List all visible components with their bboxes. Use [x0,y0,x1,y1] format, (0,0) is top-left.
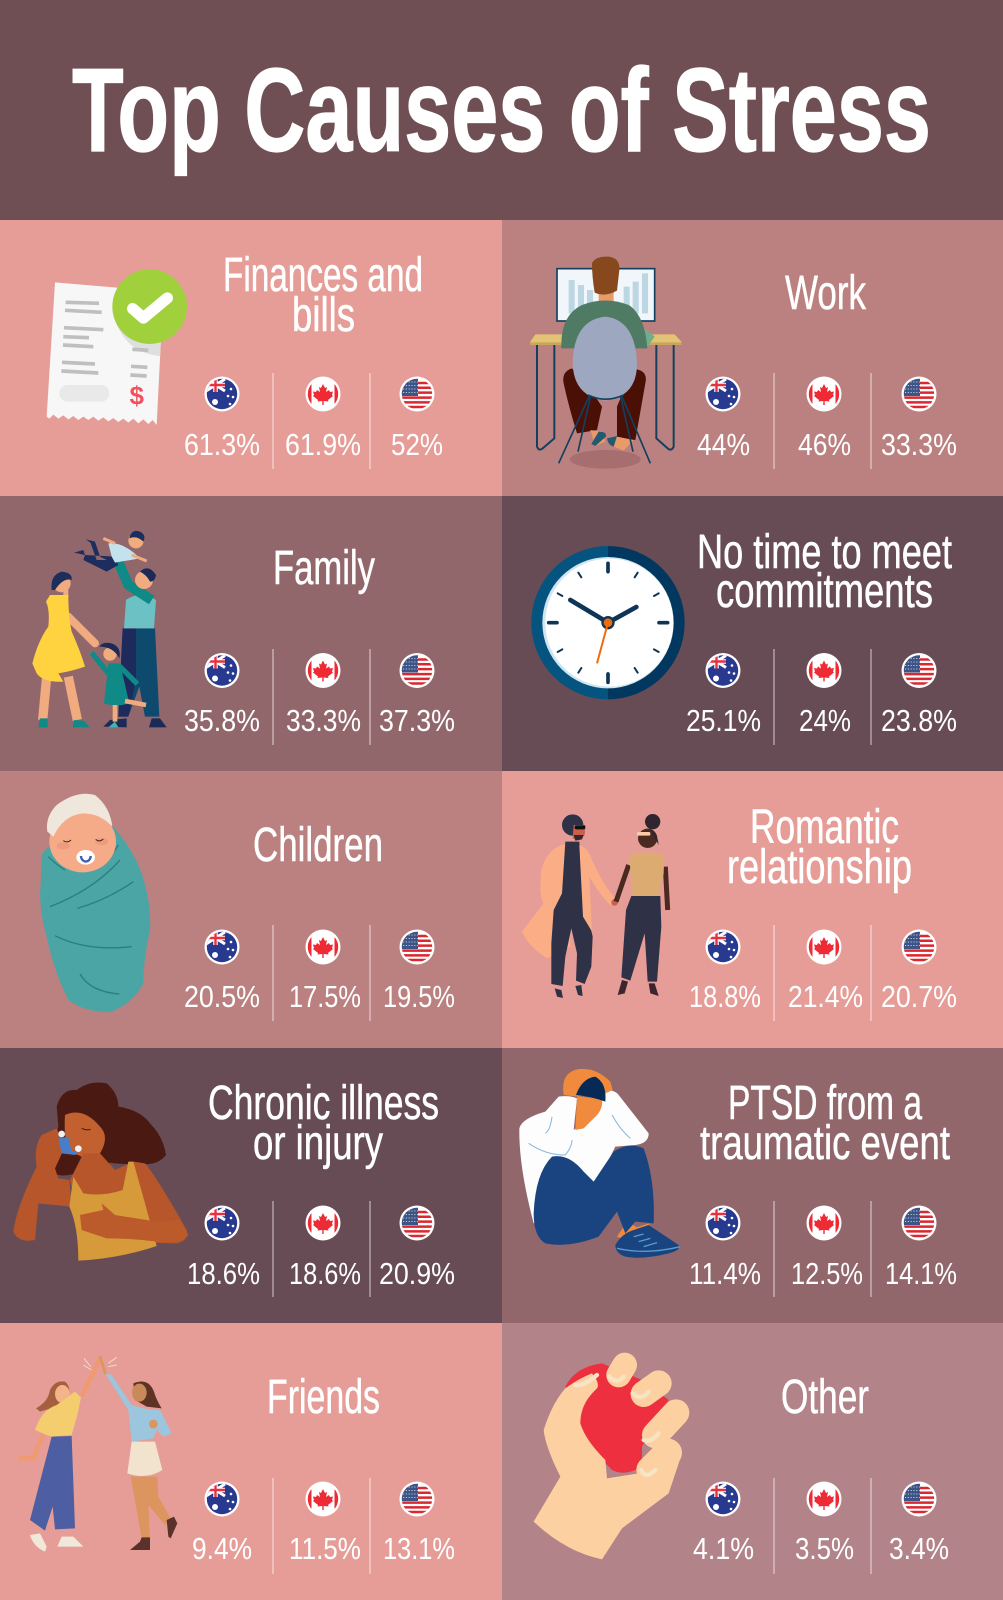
flag: Canada [806,1482,842,1516]
icon: distressed man sitting [519,1069,680,1258]
value: Australia: 20.5% [184,979,260,1014]
panel: chronic illness or injury [0,1048,502,1323]
heading: relationship [727,841,912,894]
divider pair [273,1478,370,1574]
panel background [0,220,502,496]
panel: other [502,1323,1003,1600]
value: Canada: 12.5% [791,1256,863,1291]
flag: USA [902,1206,936,1240]
value: Australia: 44% [697,427,750,462]
flag: USA [902,653,936,688]
value: USA: 52% [391,427,443,462]
flag: Canada [806,930,842,964]
header panel [0,0,1003,220]
flag: Australia [706,930,740,964]
flag: Canada [806,653,842,688]
panel: romantic relationship [502,771,1003,1048]
icon: receipt with check mark [47,269,187,425]
panel background [0,1323,502,1600]
divider pair [273,649,370,745]
value: Canada: 11.5% [289,1531,361,1566]
heading [697,526,952,618]
panel: no time to meet commitments [502,496,1003,771]
heading: Other [781,1371,869,1424]
panel: finances and bills [0,220,502,496]
panel: friends [0,1323,502,1600]
value: USA: 19.5% [383,979,455,1014]
flag: USA [902,1482,936,1516]
value: USA: 37.3% [379,703,455,738]
heading [208,1077,439,1170]
flag: Australia [204,1482,240,1516]
value: Australia: 25.1% [686,703,761,738]
value: Australia: 4.1% [693,1531,754,1566]
value: Australia: 61.3% [184,427,260,462]
panel: work [502,220,1003,496]
value: USA: 20.7% [881,979,957,1014]
value: Australia: 18.6% [187,1256,260,1291]
value: USA: 3.4% [889,1531,949,1566]
flag: Canada [306,1206,340,1240]
flag: Canada [806,376,842,412]
icon: clock [531,546,685,699]
divider pair [273,373,370,469]
value: Canada: 18.6% [289,1256,361,1291]
value: Canada: 17.5% [289,979,361,1014]
icon: hand squeezing stress ball [534,1363,682,1559]
panel background [502,1323,1003,1600]
value: Canada: 3.5% [795,1531,854,1566]
icon: woman using inhaler [13,1082,188,1261]
heading [223,249,423,342]
value: USA: 13.1% [383,1531,455,1566]
flag: Australia [706,1482,740,1516]
panel: PTSD from a traumatic event [502,1048,1003,1323]
panel: family [0,496,502,771]
value: Australia: 9.4% [192,1531,252,1566]
heading: Family [273,542,375,595]
divider pair [774,925,871,1021]
flag: Canada [306,376,340,412]
heading: commitments [716,565,933,618]
heading [700,1077,950,1170]
value: USA: 20.9% [379,1256,455,1291]
value: Canada: 24% [799,703,851,738]
flag: USA [400,376,434,412]
value: Canada: 33.3% [286,703,361,738]
divider pair [774,373,871,469]
flag: Canada [306,653,340,688]
flag: USA [400,653,434,688]
value: Australia: 11.4% [689,1256,761,1291]
flag: Australia [204,653,240,688]
value: USA: 14.1% [885,1256,957,1291]
value: Canada: 46% [798,427,851,462]
flag: Canada [306,1482,340,1516]
icon: receipt with check mark: $ [129,380,144,410]
value: Canada: 21.4% [788,979,863,1014]
divider pair [774,1201,871,1297]
panel background [502,1048,1003,1323]
divider pair [774,1478,871,1574]
heading: Chronic illness [208,1077,439,1130]
flag: Australia [204,930,240,964]
flag: Australia [706,1206,740,1240]
flag: USA [400,930,434,964]
heading: Work [785,267,867,320]
icon: person at a desk [530,257,681,469]
divider pair [273,1201,370,1297]
heading: or injury [253,1117,383,1170]
heading: Finances and [223,249,423,302]
icon: two friends high-fiving [18,1356,177,1552]
value: Canada: 61.9% [285,427,361,462]
heading: Children [253,819,383,872]
panel background [0,1048,502,1323]
panel background [502,496,1003,771]
value: USA: 23.8% [881,703,957,738]
panel: children [0,771,502,1048]
icon: couple holding hands [522,814,668,998]
divider pair [774,649,871,745]
divider pair [273,925,370,1021]
panel background [0,496,502,771]
panel background [0,771,502,1048]
panel background [502,771,1003,1048]
flag: Australia [706,653,740,688]
flag: USA [400,1482,434,1516]
value: Australia: 18.8% [689,979,761,1014]
value: USA: 33.3% [881,427,957,462]
heading: bills [292,289,355,342]
flag: USA [902,376,936,412]
flag: Canada [806,1206,842,1240]
heading: Friends [267,1371,380,1424]
heading [727,801,912,894]
icon: swaddled baby [40,794,150,1012]
icon: family with lifted baby [32,531,167,727]
flag: Australia [204,1206,240,1240]
heading: PTSD from a [728,1077,922,1130]
heading: Romantic [750,801,899,854]
value: Australia: 35.8% [184,703,260,738]
flag: Australia [204,376,240,412]
flag: Canada [306,930,340,964]
flag: USA [902,930,936,964]
flag: Australia [706,376,740,412]
flag: USA [400,1206,434,1240]
panel background [502,220,1003,496]
